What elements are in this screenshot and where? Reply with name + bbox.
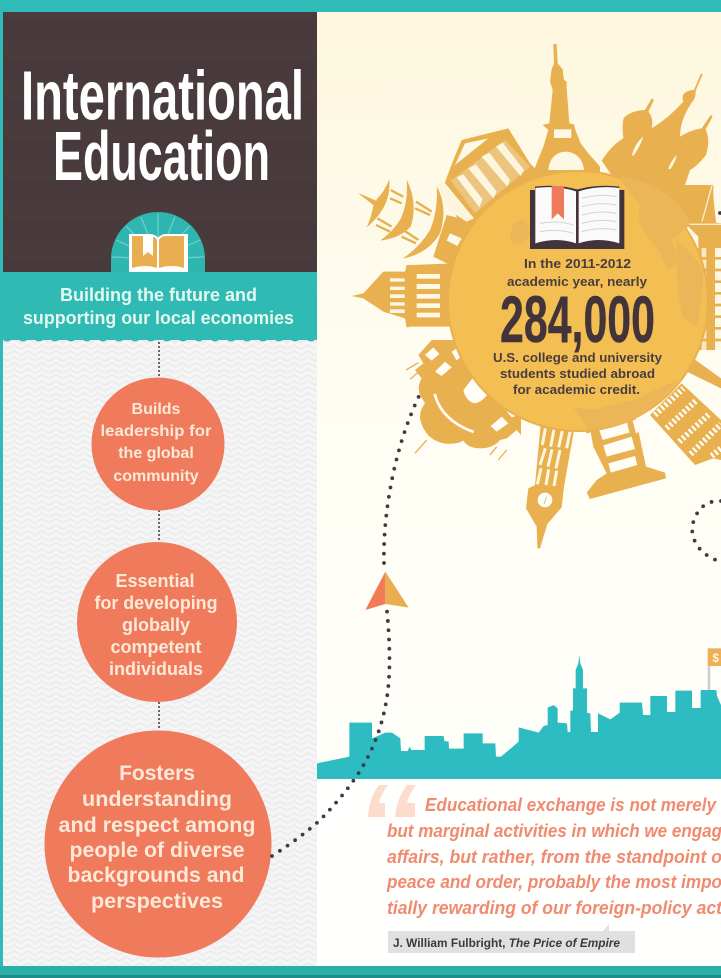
circle: globally competent individuals: Essential [115, 571, 195, 591]
statistic text: for academic credit. [513, 382, 640, 397]
circle: globally competent individuals: globally [122, 615, 190, 635]
circle: builds leadership: Builds [132, 401, 181, 418]
continents [510, 175, 703, 428]
landmark: domed palace [406, 340, 521, 460]
landmark: onion domes [602, 73, 713, 230]
landmark: right pavilion [686, 183, 721, 350]
landmark: Tower gate [585, 415, 666, 499]
panel: subtitle banner [3, 272, 317, 340]
panel: title block [3, 12, 317, 272]
panel: quote [317, 780, 721, 966]
dotted flight path [272, 611, 390, 856]
quote text: tially rewarding of our foreign-policy act [387, 898, 721, 918]
circle: fosters understanding: backgrounds and [68, 864, 244, 887]
dotted loop right [692, 213, 721, 562]
icon: open book with bookmark [530, 186, 624, 249]
circle: fosters understanding: Fosters [119, 762, 195, 785]
skyline [317, 648, 721, 779]
icon: quote mark [368, 785, 416, 817]
landmark: pagoda [357, 179, 473, 270]
title: International [21, 56, 304, 134]
flag [708, 648, 721, 690]
icon: teal badge with orange book [111, 212, 205, 272]
landmark: capitol [352, 263, 453, 327]
attribution: J. William Fulbright, The Price of Empire [393, 936, 620, 950]
quote text [386, 795, 721, 918]
title [21, 56, 304, 195]
circle: fosters understanding [44, 730, 272, 958]
landmark: Eiffel Tower [530, 44, 600, 180]
circle: builds leadership [92, 378, 224, 510]
statistic text: In the 2011-2012 [524, 256, 631, 271]
landmark: cone roof [687, 358, 721, 388]
circle: fosters understanding: understanding [82, 788, 232, 811]
statistic text: students studied abroad [500, 366, 655, 381]
landmarks ring upper [352, 44, 721, 350]
attribution [388, 924, 635, 953]
background: cream sky [317, 12, 721, 780]
statistic text [493, 256, 663, 397]
circle: builds leadership: community [113, 468, 199, 485]
circle: globally competent individuals [77, 542, 237, 702]
circle: globally competent individuals: individuals [109, 659, 203, 679]
subtitle: supporting our local economies [23, 308, 294, 328]
circle: fosters understanding: people of diverse [70, 839, 244, 862]
statistic text: U.S. college and university [493, 350, 663, 365]
circle: fosters understanding: and respect among [58, 814, 256, 837]
circle: globally competent individuals: for developing [94, 593, 218, 613]
globe [447, 170, 709, 432]
panel: benefits column [3, 337, 317, 966]
circle: globally competent individuals: competent [110, 637, 202, 657]
quote text: affairs, but rather, from the standpoint o [387, 847, 721, 867]
subtitle: Building the future and [60, 285, 257, 305]
landmark: Big Ben [526, 425, 574, 548]
statistic text: academic year, nearly [507, 274, 648, 289]
title: Education [53, 117, 270, 195]
circle: builds leadership: leadership for [100, 423, 212, 440]
circle: builds leadership: the global [118, 445, 194, 462]
landmark: bridge tower [650, 383, 721, 465]
icon: paper plane arrow [365, 572, 409, 610]
subtitle [23, 285, 294, 328]
landmark: Parthenon [436, 128, 543, 228]
landmarks ring lower [526, 358, 721, 548]
flag: $ [712, 651, 719, 665]
circle: fosters understanding: perspectives [91, 890, 223, 913]
dotted flight path upper [384, 396, 419, 563]
